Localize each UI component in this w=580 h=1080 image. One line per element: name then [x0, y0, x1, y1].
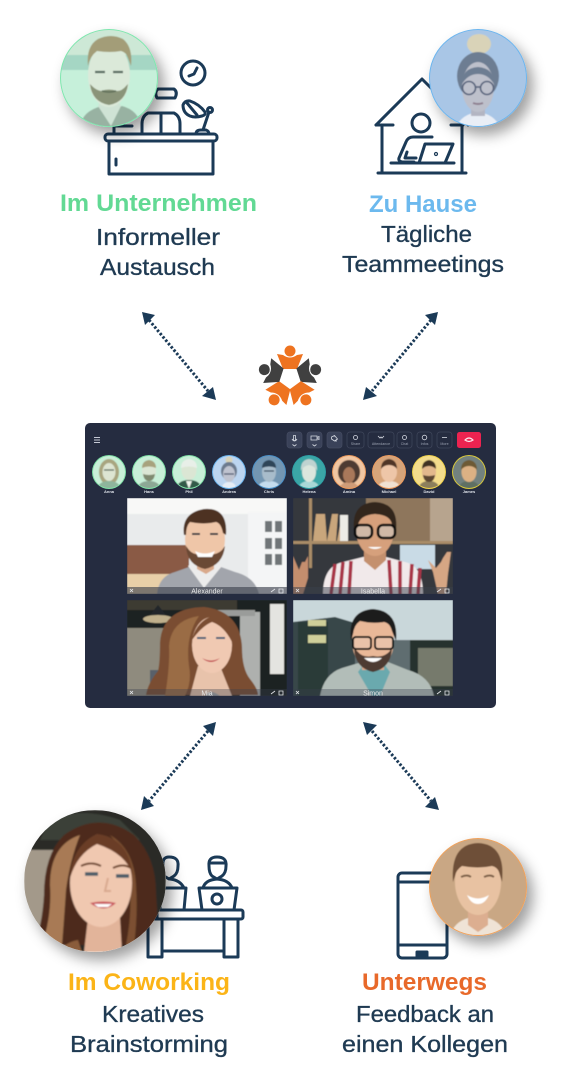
photo: young man in orange tint — [429, 838, 527, 936]
participant: David — [412, 455, 446, 494]
text: Feedback an einen Kollegen: einen Kollegen — [342, 1031, 508, 1057]
text: Informeller Austausch — [96, 224, 220, 280]
tile controls — [130, 589, 449, 695]
video tile: Mia — [127, 600, 287, 698]
text: Kreatives Brainstorming: Kreatives — [102, 1001, 204, 1027]
arrow: bottom left — [141, 722, 216, 810]
toolbar — [287, 432, 481, 448]
text: Informeller Austausch: Informeller — [96, 224, 220, 250]
text: Feedback an einen Kollegen: Feedback an — [356, 1001, 494, 1027]
participant: Chris: Chris — [264, 489, 275, 494]
participant: Phil: Phil — [185, 489, 193, 494]
photo: man in green tint — [60, 29, 158, 128]
panel: video conference window — [85, 423, 496, 708]
icon: smartphone — [398, 873, 447, 958]
panel: Zu Hause — [342, 29, 527, 277]
participant: Chris — [252, 455, 286, 494]
video tile: Isabella: Isabella — [361, 588, 385, 596]
icon: coworking table — [148, 857, 243, 957]
toolbar: Chat — [401, 442, 408, 446]
video tile: Mia: Mia — [201, 690, 213, 698]
text: Informeller Austausch: Austausch — [100, 254, 215, 280]
participant: Michael — [372, 455, 406, 494]
text: Kreatives Brainstorming — [70, 1001, 228, 1057]
photo: smiling woman — [24, 810, 166, 952]
video tile: Alexander — [127, 498, 287, 596]
arrow: top left — [142, 312, 216, 400]
participant: Amina: Amina — [343, 489, 356, 494]
video tile: Isabella — [293, 498, 453, 596]
participant: Anna: Anna — [104, 489, 115, 494]
participant thumbnails — [92, 455, 486, 494]
heading: Zu Hause — [369, 191, 477, 218]
name bar — [127, 587, 287, 594]
participant: Michael: Michael — [382, 489, 396, 494]
toolbar: Infos — [421, 442, 429, 446]
icon: office desk — [105, 61, 217, 174]
participant: Andrea — [212, 455, 246, 494]
panel: Unterwegs — [342, 838, 527, 1057]
participant: Phil — [172, 455, 206, 494]
heading: Im Coworking — [68, 969, 230, 996]
heading: Im Unternehmen — [60, 190, 257, 217]
video tile: Alexander: Alexander — [191, 588, 223, 596]
icon: menu — [94, 438, 100, 442]
text: Kreatives Brainstorming: Brainstorming — [70, 1031, 228, 1057]
toolbar: More — [440, 442, 449, 446]
panel: Im Coworking — [24, 810, 243, 1057]
text: Tägliche Teammeetings: Teammeetings — [342, 251, 504, 277]
participant: James: James — [463, 489, 476, 494]
logo: five people in a circle — [255, 346, 325, 412]
panel: Im Unternehmen — [60, 29, 257, 280]
participant: James — [452, 455, 486, 494]
participant: David: David — [424, 489, 435, 494]
participant: Hans: Hans — [144, 489, 155, 494]
window background — [85, 423, 496, 708]
participant: Hans — [132, 455, 166, 494]
video tile: Simon — [293, 600, 453, 698]
video tile: Simon: Simon — [363, 690, 383, 698]
participant: Helena: Helena — [302, 489, 316, 494]
icon: house with laptop — [376, 79, 468, 173]
participant: Helena — [292, 455, 326, 494]
text: Tägliche Teammeetings: Tägliche — [381, 221, 472, 247]
participant: Amina — [332, 455, 366, 494]
heading: Unterwegs — [362, 969, 487, 996]
toolbar: Attendance — [372, 442, 390, 446]
participant: Anna — [92, 455, 126, 494]
toolbar: Share — [351, 442, 360, 446]
text: Tägliche Teammeetings — [342, 221, 504, 277]
participant: Andrea: Andrea — [222, 489, 237, 494]
text: Feedback an einen Kollegen — [342, 1001, 508, 1057]
photo: woman in blue tint — [429, 29, 527, 127]
arrow: top right — [363, 312, 438, 400]
arrow: bottom right — [363, 722, 439, 810]
